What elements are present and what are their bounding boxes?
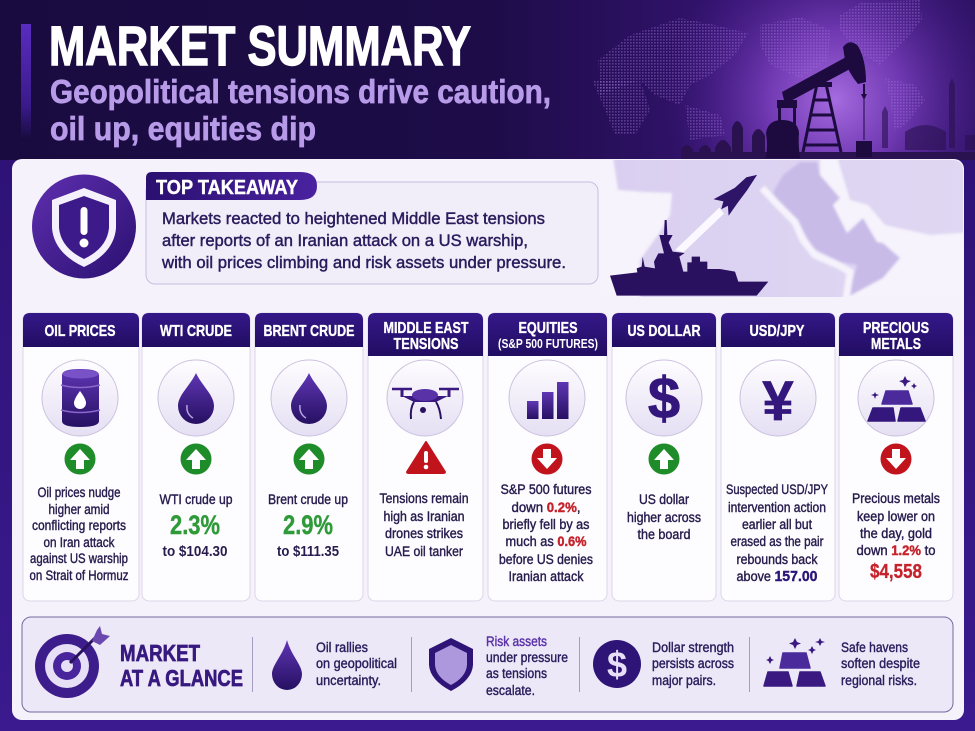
card text: $4,558: [870, 561, 922, 583]
item: oil rallies: on geopolitical: [316, 656, 397, 671]
item: dollar strength: persists across: [652, 656, 734, 671]
item: risk assets: Risk assets: [486, 634, 547, 649]
card text: to $111.35: [277, 543, 339, 560]
card text: much as 0.6%: [506, 534, 586, 549]
card text: to $104.30: [162, 543, 228, 560]
card text: against US warship: [30, 551, 128, 566]
takeaway text box: with oil prices climbing and risk assets under pressure.: [161, 253, 566, 272]
card text: Oil prices nudge: [38, 485, 120, 500]
takeaway text box: [146, 182, 598, 284]
card: precious metals: PRECIOUS: [863, 320, 929, 337]
market at a glance heading: [120, 640, 243, 691]
card: us dollar: US DOLLAR: [628, 323, 701, 340]
card text: down 1.2% to: [856, 543, 936, 558]
title: MARKET SUMMARY: [49, 14, 471, 77]
icon: down arrow: [532, 444, 562, 474]
icon: up arrow: [180, 444, 212, 474]
icon: target with arrow: [35, 626, 110, 698]
card text: [30, 485, 129, 583]
card text: UAE oil tanker: [385, 544, 463, 559]
card: middle east tensions: TENSIONS: [394, 336, 459, 353]
item: risk assets: [429, 634, 568, 698]
card text: before US denies: [499, 552, 593, 567]
item: safe havens: [764, 638, 920, 688]
card text: on Iran attack: [44, 535, 115, 550]
item: safe havens: soften despite: [841, 656, 920, 671]
item: dollar strength: major pairs.: [652, 673, 716, 688]
card text: on Strait of Hormuz: [30, 568, 129, 583]
card: wti crude: WTI CRUDE: [160, 323, 232, 340]
icon: dollar: $: [648, 366, 680, 431]
icon: yen: ¥: [762, 369, 794, 432]
card text: rebounds back: [736, 552, 818, 567]
subtitle: oil up, equities dip: [50, 110, 316, 147]
item: risk assets: under pressure: [486, 650, 568, 665]
market at a glance heading: AT A GLANCE: [120, 665, 243, 691]
header accent bar: [21, 24, 31, 141]
card: middle east tensions: MIDDLE EAST: [384, 320, 469, 337]
card text: higher across: [627, 510, 701, 525]
card: brent crude: BRENT CRUDE: [264, 323, 355, 340]
card text: erased as the pair: [730, 534, 824, 549]
card text: drones strikes: [385, 526, 463, 541]
card: middle east tensions: [368, 313, 483, 601]
item: dollar strength: $: [607, 644, 627, 685]
card text: intervention action: [728, 500, 826, 515]
icon: yen: [740, 360, 816, 436]
market at a glance heading: MARKET: [120, 640, 200, 666]
icon: down arrow: [880, 444, 912, 474]
item: oil rallies: Oil rallies: [316, 640, 368, 655]
main white panel: [12, 159, 964, 720]
item: risk assets: escalate.: [486, 683, 535, 698]
card text: Iranian attack: [508, 569, 584, 584]
map backdrop: [613, 160, 963, 297]
card text: the day, gold: [860, 526, 932, 541]
card text: S&P 500 futures: [500, 482, 592, 497]
panel: top takeaway: [32, 160, 963, 297]
card text: the board: [638, 527, 690, 542]
card text: US dollar: [639, 492, 689, 507]
icon: dollar: [626, 360, 702, 436]
icon: oil drop: [158, 360, 234, 436]
card text: Tensions remain: [380, 491, 468, 506]
icon: up arrow: [64, 444, 96, 474]
card: equities: EQUITIES: [518, 320, 578, 337]
card: equities: (S&P 500 FUTURES): [498, 337, 598, 351]
card text: down 0.2%,: [512, 500, 580, 515]
card text: above 157.00: [736, 568, 818, 585]
card: usd/jpy: USD/JPY: [750, 323, 805, 340]
card text: high as Iranian: [384, 509, 464, 524]
card text: [380, 491, 468, 559]
card: equities: [488, 313, 607, 601]
card text: 2.9%: [283, 510, 333, 540]
card text: [726, 482, 828, 585]
panel: market at a glance: [22, 617, 953, 712]
card text: [852, 491, 940, 583]
card text: Brent crude up: [268, 492, 348, 507]
item: dollar strength: Dollar strength: [652, 640, 734, 655]
item: safe havens: Safe havens: [841, 640, 908, 655]
card: usd/jpy: [721, 313, 835, 601]
top takeaway label: TOP TAKEAWAY: [156, 177, 299, 199]
card text: [627, 492, 701, 542]
subtitle: Geopolitical tensions drive caution,: [50, 73, 551, 110]
item: dollar strength: [593, 640, 734, 688]
card text: [268, 492, 348, 560]
item: risk assets: as tensions: [486, 666, 547, 681]
card: precious metals: METALS: [871, 336, 921, 353]
card text: [499, 482, 593, 584]
icon: bar chart: [509, 360, 585, 436]
card: precious metals: [839, 313, 953, 601]
shield icon: [32, 174, 136, 278]
card text: Suspected USD/JPY: [726, 482, 828, 497]
item: oil rallies: [272, 640, 397, 690]
card text: briefly fell by as: [502, 517, 590, 532]
icon: gold bars: [858, 360, 934, 436]
takeaway text box: after reports of an Iranian attack on a US warship,: [162, 231, 528, 250]
card text: Precious metals: [852, 491, 940, 506]
item: safe havens: regional risks.: [841, 673, 917, 688]
card text: conflicting reports: [32, 518, 126, 533]
card text: 2.3%: [170, 510, 220, 540]
icon: warning triangle: [407, 442, 445, 473]
skyline silhouette: [681, 78, 975, 160]
card: wti crude: [142, 313, 250, 601]
card: brent crude: [255, 313, 363, 601]
oil pump silhouette: [766, 42, 872, 158]
icon: up arrow: [294, 444, 324, 474]
icon: up arrow: [648, 444, 680, 474]
card text: WTI crude up: [160, 492, 232, 507]
takeaway text box: Markets reacted to heightened Middle East tensions: [162, 209, 545, 228]
card: oil prices: OIL PRICES: [44, 323, 116, 340]
item: oil rallies: uncertainty.: [316, 673, 381, 688]
card text: keep lower on: [857, 509, 935, 524]
icon: oil barrel: [42, 360, 118, 436]
icon: drone: [387, 360, 463, 436]
warship and missile: [610, 176, 768, 296]
card: oil prices: [23, 313, 139, 601]
card: us dollar: [612, 313, 716, 601]
card text: [160, 492, 232, 560]
subtitle: [50, 73, 551, 147]
header banner: [0, 0, 975, 160]
card text: earlier all but: [742, 517, 812, 532]
dotted world map: [592, 0, 925, 140]
icon: oil drop: [271, 360, 347, 436]
card text: higher amid: [48, 502, 110, 517]
